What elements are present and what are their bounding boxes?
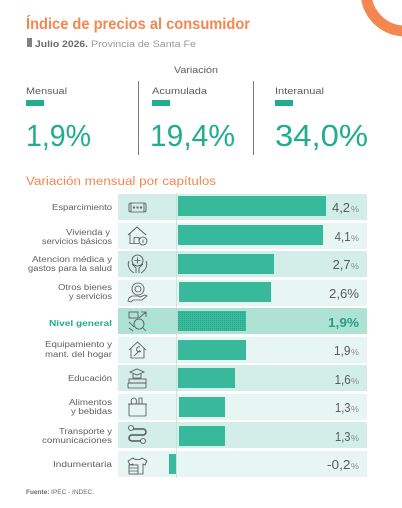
row: indumentaria: -0,2 xyxy=(327,457,350,472)
row: transporte y comunicaciones: % xyxy=(351,433,359,443)
row: atención médica y gastos para la salud: 2,7 xyxy=(333,257,351,272)
row: otros bienes y servicios: y servicios xyxy=(69,292,112,301)
subtitle xyxy=(27,38,196,49)
row: vivienda y servicios básicos: 4,1 xyxy=(335,229,351,244)
row: educación: 1,6 xyxy=(335,372,351,387)
row: alimentos y bebidas: y bebidas xyxy=(71,407,112,416)
row: transporte y comunicaciones: comunicaciones xyxy=(42,436,112,445)
row: indumentaria: % xyxy=(351,461,359,471)
panel: variación mensual: 1,9% xyxy=(26,118,91,153)
icon: house with info xyxy=(128,227,147,245)
row: alimentos y bebidas: % xyxy=(351,404,359,414)
icon: hand holding coin xyxy=(128,283,147,302)
panel: variación acumulada xyxy=(138,81,235,155)
source note: Fuente: IPEC - INDEC. xyxy=(26,490,94,496)
row: nivel general: 1,9% xyxy=(328,315,359,330)
row: esparcimiento xyxy=(52,194,367,220)
row: indumentaria xyxy=(53,451,367,477)
row: transporte y comunicaciones: 1,3 xyxy=(335,429,350,444)
icon: ticket xyxy=(129,203,146,212)
row: nivel general: Nivel general xyxy=(49,319,112,328)
row: equipamiento y mantenimiento del hogar: Equipamiento y xyxy=(45,340,112,349)
row: alimentos y bebidas: 1,3 xyxy=(335,400,350,415)
row: transporte y comunicaciones xyxy=(42,422,367,448)
row: atención médica y gastos para la salud: % xyxy=(351,261,359,271)
row: otros bienes y servicios: Otros bienes xyxy=(58,283,112,292)
row: alimentos y bebidas xyxy=(69,394,367,420)
row: transporte y comunicaciones: Transporte y xyxy=(59,427,112,436)
icon: route xyxy=(128,426,146,444)
row: educación xyxy=(68,365,367,391)
row: atención médica y gastos para la salud xyxy=(28,251,367,277)
subtitle: Provincia de Santa Fe xyxy=(91,39,196,49)
row: vivienda y servicios básicos: servicios básicos xyxy=(42,237,112,246)
row: equipamiento y mantenimiento del hogar: mant. del hogar xyxy=(45,350,112,359)
icon: house with tools xyxy=(129,342,146,358)
row: esparcimiento: 4,2 xyxy=(332,200,350,215)
row: equipamiento y mantenimiento del hogar: 1,9 xyxy=(334,343,350,358)
row: otros bienes y servicios: 2,6% xyxy=(329,286,359,301)
row: vivienda y servicios básicos xyxy=(42,223,367,249)
row: educación: Educación xyxy=(68,374,112,383)
row: otros bienes y servicios xyxy=(58,280,367,306)
panel: variación mensual: Mensual xyxy=(26,86,67,96)
heading: variación: Variación xyxy=(174,65,218,75)
row: atención médica y gastos para la salud: Atencion médica y xyxy=(32,255,112,264)
subtitle: Julio 2026. xyxy=(35,39,88,49)
row: vivienda y servicios básicos: % xyxy=(351,233,359,243)
panel: variación acumulada: Acumulada xyxy=(152,86,207,96)
panel: variación interanual xyxy=(253,81,368,155)
title: Índice de precios al consumidor xyxy=(26,16,250,33)
row: indumentaria: Indumentaria xyxy=(53,460,113,469)
row: esparcimiento: Esparcimiento xyxy=(52,203,113,212)
panel: variación acumulada: 19,4% xyxy=(150,118,235,153)
panel: variación interanual: Interanual xyxy=(275,86,324,96)
panel: variación interanual: 34,0% xyxy=(275,118,368,153)
panel: variación mensual xyxy=(26,86,91,153)
row: nivel general xyxy=(49,308,367,334)
row: vivienda y servicios básicos: Vivienda y xyxy=(66,228,110,237)
icon: shirt and folded clothes xyxy=(128,458,147,474)
bar chart: capítulos xyxy=(28,193,367,478)
row: atención médica y gastos para la salud: gastos para la salud xyxy=(28,264,112,273)
icon: graduation cap on books xyxy=(128,369,146,388)
icon: hands with cross xyxy=(128,255,147,273)
icon: price search xyxy=(129,312,146,331)
row: alimentos y bebidas: Alimentos xyxy=(69,398,112,407)
icon: grocery basket xyxy=(128,398,147,416)
row: esparcimiento: % xyxy=(351,204,359,214)
heading: variación mensual por capítulos: Variación mensual por capítulos xyxy=(26,176,216,188)
row: equipamiento y mantenimiento del hogar xyxy=(45,337,367,363)
decorative orange arc xyxy=(366,0,402,31)
row: equipamiento y mantenimiento del hogar: % xyxy=(351,347,359,357)
row: educación: % xyxy=(351,376,359,386)
